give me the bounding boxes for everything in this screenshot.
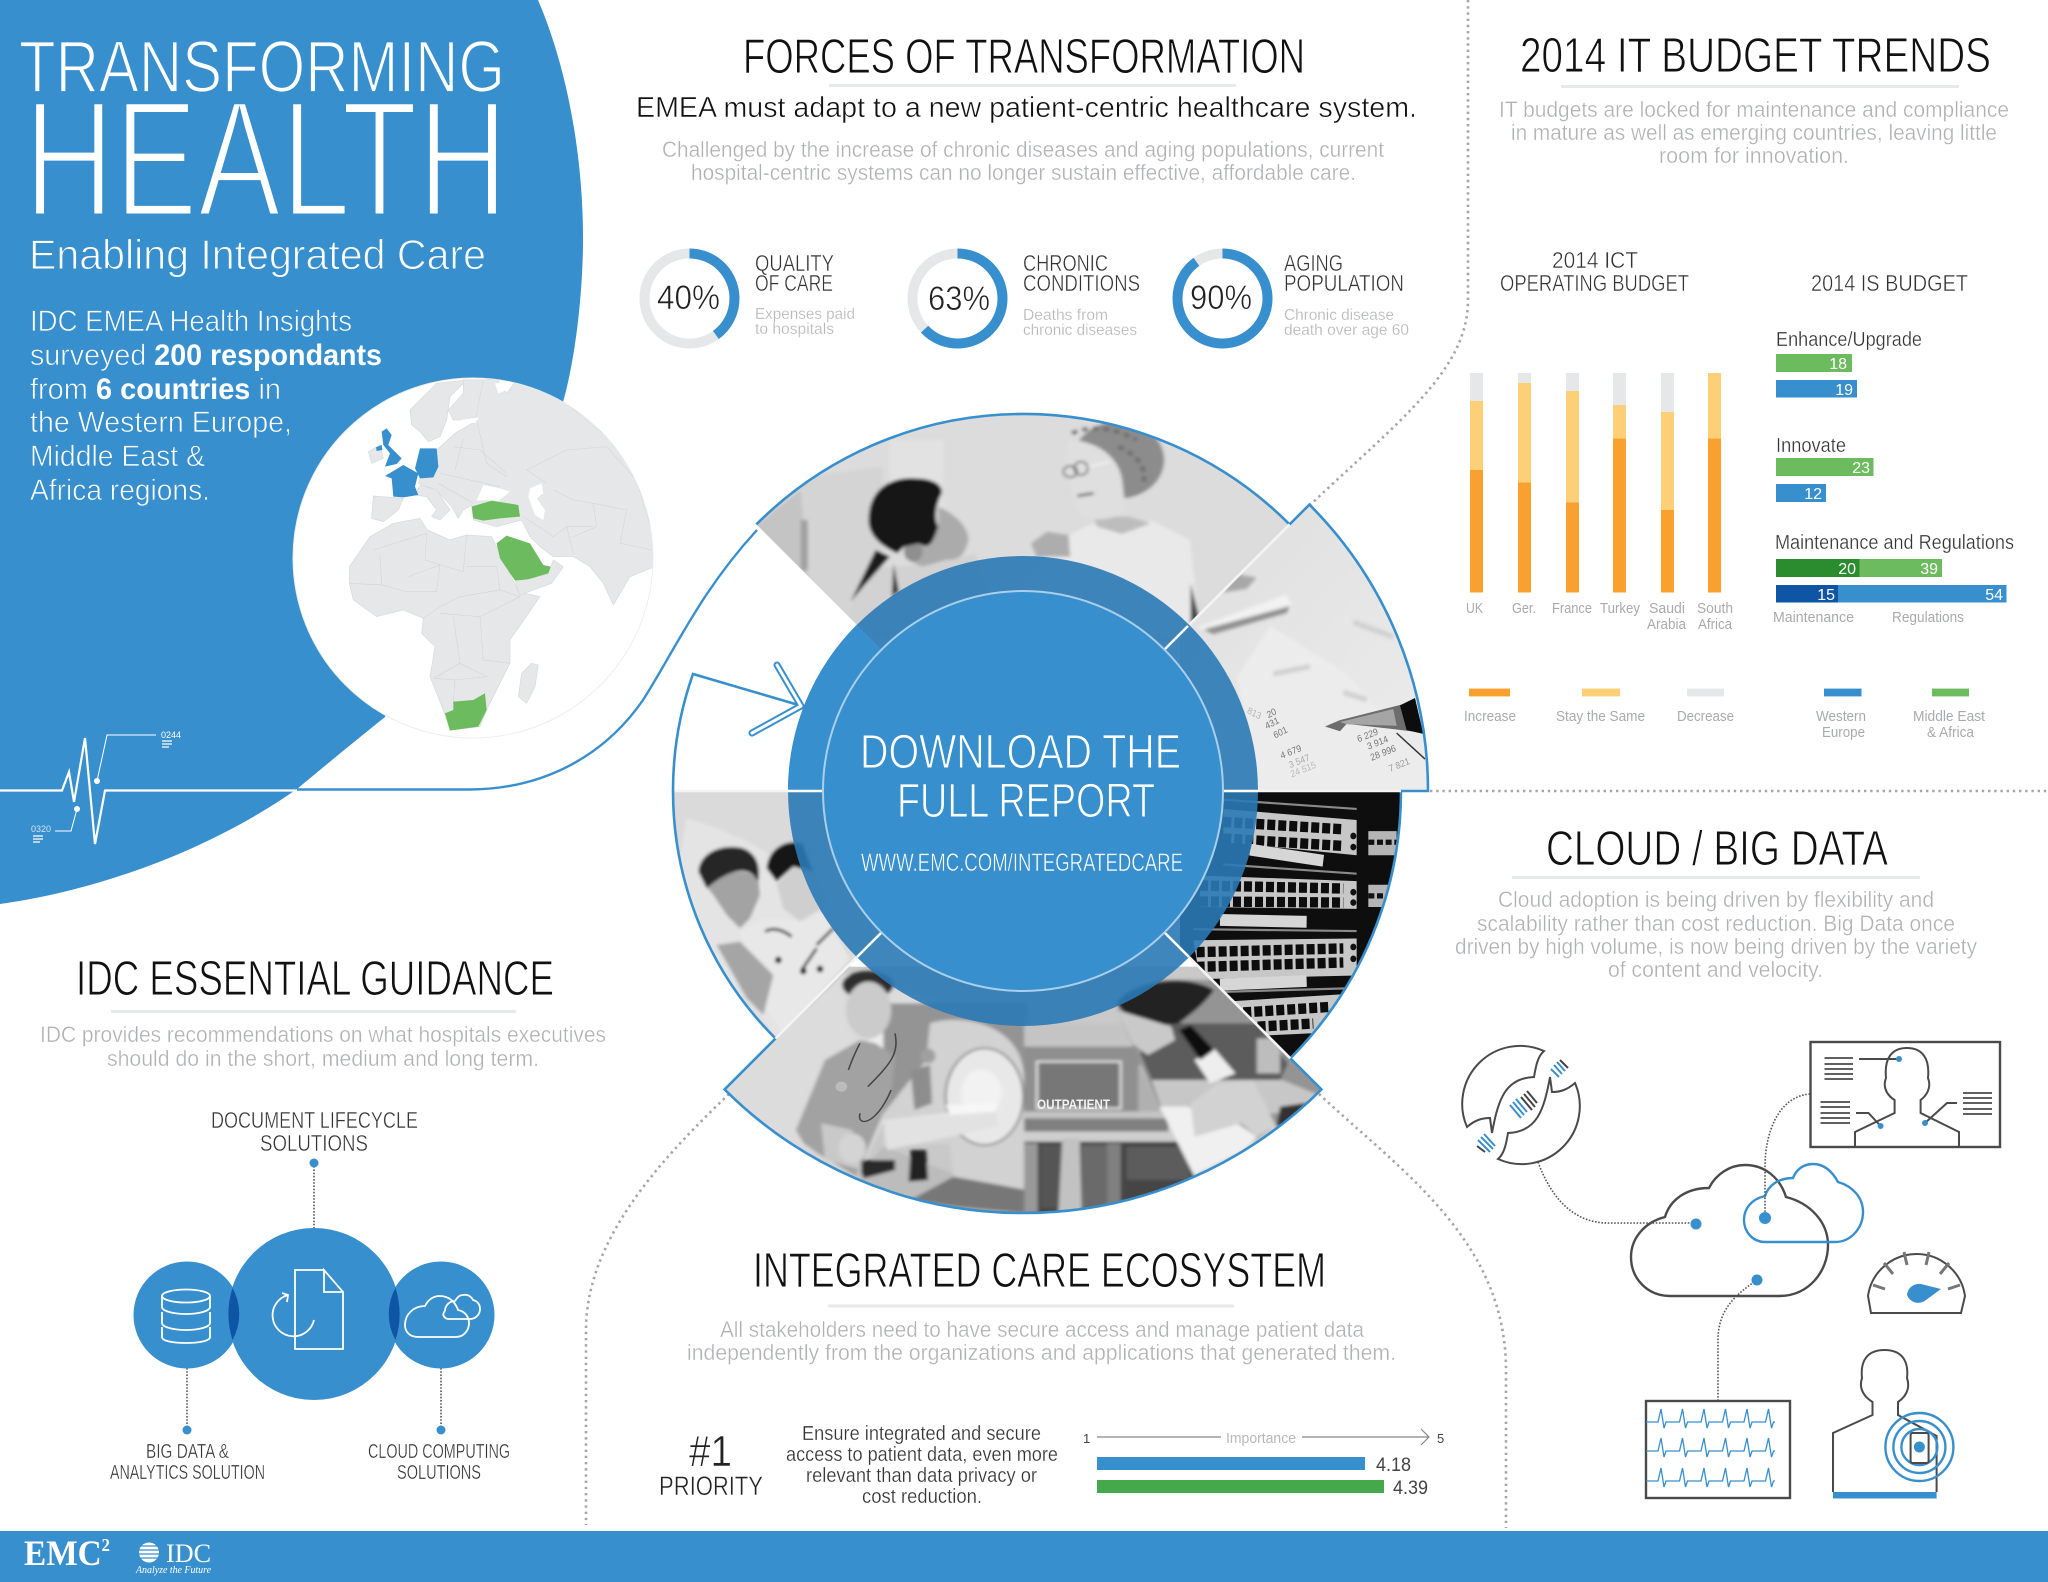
arrow	[752, 665, 801, 733]
heading: FORCES OF TRANSFORMATION	[743, 30, 1305, 84]
importance chart: 4.39	[1393, 1478, 1428, 1499]
priority: #1	[689, 1427, 732, 1476]
priority	[659, 1427, 763, 1501]
icon: clouds	[1538, 1094, 1863, 1400]
description: of content and velocity.	[1608, 957, 1823, 982]
importance chart: 1	[1083, 1431, 1090, 1446]
label quality: Expenses paid	[755, 306, 855, 323]
figures on paper	[1246, 705, 1411, 779]
label: cloud computing: SOLUTIONS	[397, 1462, 481, 1484]
figures on paper: 20	[1265, 706, 1278, 720]
importance chart: 5	[1437, 1431, 1444, 1446]
label: big data: ANALYTICS SOLUTION	[110, 1462, 265, 1484]
photo: server racks	[1180, 792, 1400, 1056]
logo: IDC: Analyze the Future	[135, 1565, 212, 1576]
central disk call to action: FULL REPORT	[897, 775, 1155, 828]
ICT chart title: 2014 ICT	[1552, 247, 1638, 273]
description: in mature as well as emerging countries, leaving little	[1511, 120, 1997, 145]
central disk call to action: WWW.EMC.COM/INTEGRATEDCARE	[861, 849, 1183, 877]
donut 63	[912, 254, 1002, 344]
description: IDC provides recommendations on what hospitals executives	[40, 1022, 606, 1047]
IS legend: Western	[1816, 708, 1866, 725]
description	[687, 1317, 1396, 1365]
ICT bar labels: Africa	[1698, 616, 1733, 633]
ICT legend	[1464, 689, 1734, 725]
importance chart: Importance	[1226, 1430, 1296, 1447]
ICT chart title	[1500, 247, 1689, 296]
country borders	[350, 420, 652, 703]
green countries	[445, 501, 551, 731]
label quality: OF CARE	[755, 270, 833, 296]
logo: IDC	[134, 1539, 212, 1576]
label quality	[755, 250, 855, 338]
figures on paper: 24 515	[1289, 760, 1317, 779]
icon: database	[162, 1290, 210, 1343]
label aging: Chronic disease	[1284, 307, 1394, 324]
madagascar	[518, 663, 538, 703]
enhance: Enhance/Upgrade	[1776, 329, 1922, 351]
figures on paper: 3 547	[1287, 752, 1311, 770]
ICT bar labels: Turkey	[1600, 600, 1640, 617]
central photo wheel	[667, 410, 1447, 1227]
description: All stakeholders need to have secure access and manage patient data	[720, 1317, 1365, 1342]
survey text: IDC EMEA Health Insights	[30, 305, 352, 338]
ICT chart title: OPERATING BUDGET	[1500, 270, 1689, 296]
maintenance	[1773, 532, 2014, 626]
title	[19, 27, 508, 252]
heading: CLOUD / BIG DATA	[1546, 822, 1888, 876]
map globe	[293, 378, 655, 738]
label aging: death over age 60	[1284, 322, 1409, 339]
figures on paper: 6 229	[1356, 726, 1379, 744]
photo: nurse, scanner, outpatient building, lab	[726, 966, 1320, 1212]
ICT bar labels	[1466, 600, 1733, 633]
maintenance: 20	[1838, 561, 1856, 578]
ICT legend: Decrease	[1677, 708, 1734, 725]
innovate	[1776, 435, 1874, 503]
title: HEALTH	[24, 67, 508, 252]
IDC essential guidance panel	[40, 952, 606, 1484]
description: hospital-centric systems can no longer sustain effective, affordable care.	[691, 160, 1356, 185]
segment dividers	[675, 524, 1401, 1058]
ICT bar labels: UK	[1466, 600, 1483, 617]
survey text: Middle East &	[30, 440, 205, 473]
logo: IDC: IDC	[166, 1539, 211, 1568]
ICT bar labels: Saudi	[1649, 600, 1685, 617]
logo: EMC: EMC	[24, 1533, 108, 1573]
figures on paper: 601	[1272, 724, 1289, 741]
heartbeat line	[0, 730, 297, 844]
ICT bar labels: South	[1697, 600, 1733, 617]
label: big data: BIG DATA &	[146, 1441, 229, 1463]
donut 40: 40%	[657, 279, 720, 317]
label chronic: CONDITIONS	[1023, 270, 1140, 296]
integrated care ecosystem panel	[659, 1244, 1444, 1508]
label aging	[1284, 250, 1409, 339]
forces of transformation panel	[636, 30, 1417, 344]
enhance: 18	[1829, 356, 1847, 373]
ring	[788, 556, 1258, 1026]
label chronic: chronic diseases	[1023, 322, 1137, 339]
enhance	[1776, 329, 1922, 399]
description: independently from the organizations and applications that generated them.	[687, 1340, 1396, 1365]
central disk call to action: DOWNLOAD THE	[860, 726, 1181, 779]
figures on paper: 431	[1263, 715, 1281, 731]
iberia	[372, 496, 403, 522]
figures on paper: 28 996	[1369, 743, 1397, 763]
label: document lifecycle: SOLUTIONS	[260, 1130, 368, 1156]
survey text: Africa regions.	[30, 474, 210, 507]
subtitle: Enabling Integrated Care	[29, 231, 486, 278]
label quality: QUALITY	[755, 250, 834, 276]
tagline: EMEA must adapt to a new patient-centric healthcare system.	[636, 92, 1417, 124]
maintenance: Maintenance	[1773, 609, 1854, 626]
description: room for innovation.	[1659, 143, 1849, 168]
eurasia	[418, 378, 655, 605]
maintenance: 39	[1920, 561, 1938, 578]
label aging: AGING	[1284, 250, 1343, 276]
priority text: Ensure integrated and secure	[802, 1423, 1041, 1445]
finland	[448, 380, 485, 420]
priority text: access to patient data, even more	[786, 1444, 1058, 1466]
priority text: relevant than data privacy or	[806, 1465, 1037, 1487]
heading: INTEGRATED CARE ECOSYSTEM	[753, 1244, 1326, 1298]
outline	[673, 414, 1428, 1213]
description: should do in the short, medium and long term.	[107, 1046, 539, 1071]
innovate: 12	[1804, 486, 1822, 503]
icon: dna	[1462, 1046, 1580, 1164]
description	[40, 1022, 606, 1071]
maintenance: 54	[1985, 587, 2003, 604]
heartbeat line: 0320	[31, 824, 51, 834]
photo: nurse and patient	[757, 415, 1288, 625]
description	[1455, 887, 1977, 982]
arabia south	[515, 560, 563, 595]
label: big data	[110, 1441, 265, 1484]
photo: doctors	[674, 791, 856, 1036]
label chronic: Deaths from	[1023, 307, 1108, 324]
heading: IDC ESSENTIAL GUIDANCE	[76, 952, 554, 1006]
title: TRANSFORMING	[19, 27, 505, 108]
photo: pen and figures	[1190, 506, 1426, 790]
donut 90: 90%	[1190, 279, 1252, 317]
venn diagram	[134, 1158, 494, 1434]
label aging: POPULATION	[1284, 270, 1404, 296]
icon: person with implant	[1833, 1350, 1953, 1498]
ICT bar labels: France	[1552, 600, 1592, 617]
ICT bar labels: Arabia	[1647, 616, 1687, 633]
enhance: 19	[1835, 382, 1853, 399]
italy	[415, 485, 450, 520]
maintenance: Regulations	[1892, 609, 1964, 626]
icon: clouds white	[405, 1295, 480, 1337]
IS legend: Middle East	[1913, 708, 1986, 725]
donut 90	[1178, 254, 1268, 344]
innovate: Innovate	[1776, 435, 1846, 457]
IS legend	[1816, 689, 1986, 741]
label chronic	[1023, 250, 1140, 339]
priority: PRIORITY	[659, 1471, 763, 1501]
icon: ecg screen	[1646, 1401, 1790, 1498]
donut 40	[644, 254, 734, 344]
blue countries	[376, 428, 438, 497]
survey text: surveyed 200 respondants	[30, 339, 382, 372]
priority text	[786, 1423, 1058, 1508]
innovate: 23	[1852, 460, 1870, 477]
central disk call to action	[823, 591, 1223, 991]
label quality: to hospitals	[755, 321, 834, 338]
outpatient sign: OUTPATIENT	[1037, 1096, 1110, 1112]
description: driven by high volume, is now being driven by the variety	[1455, 934, 1977, 959]
budget trends panel	[1464, 29, 2014, 741]
survey text	[30, 305, 382, 507]
IS legend: & Africa	[1927, 724, 1975, 741]
survey text: the Western Europe,	[30, 406, 292, 439]
ICT bar labels: Ger.	[1512, 600, 1536, 617]
black sea and caspian	[460, 382, 545, 520]
donut 63: 63%	[928, 280, 990, 318]
label: document lifecycle: DOCUMENT LIFECYCLE	[211, 1107, 418, 1133]
survey text: from 6 countries in	[30, 373, 281, 406]
description: Cloud adoption is being driven by flexibility and	[1498, 887, 1934, 912]
description: scalability rather than cost reduction. Big Data once	[1477, 911, 1955, 936]
figures on paper: 7 821	[1387, 756, 1411, 774]
logo: EMC: 2	[102, 1535, 110, 1555]
IS legend: Europe	[1822, 724, 1865, 741]
label: cloud computing	[368, 1441, 510, 1484]
priority text: cost reduction.	[862, 1486, 982, 1508]
figures on paper: 813	[1246, 705, 1263, 721]
IS chart: 2014 IS BUDGET	[1811, 270, 1968, 296]
description	[1499, 97, 2009, 168]
maintenance: Maintenance and Regulations	[1775, 532, 2014, 554]
footer band	[0, 1531, 2048, 1582]
cloud / big data panel	[1455, 822, 2000, 1498]
label: document lifecycle	[211, 1107, 418, 1156]
description	[662, 137, 1384, 185]
heartbeat line: 0244	[161, 730, 181, 740]
maintenance: 15	[1817, 587, 1835, 604]
description: Challenged by the increase of chronic diseases and aging populations, current	[662, 137, 1384, 162]
ireland	[368, 445, 383, 463]
importance chart: 4.18	[1376, 1455, 1411, 1476]
label chronic: CHRONIC	[1023, 250, 1108, 276]
icon: document cycle	[273, 1270, 343, 1349]
ICT legend: Increase	[1464, 708, 1516, 725]
ICT legend: Stay the Same	[1556, 708, 1645, 725]
importance chart	[1083, 1429, 1444, 1499]
description: IT budgets are locked for maintenance and compliance	[1499, 97, 2009, 122]
figures on paper: 4 679	[1279, 743, 1303, 761]
figures on paper: 3 914	[1366, 734, 1389, 752]
IS chart	[1773, 270, 2014, 626]
icon: patient scan	[1810, 1042, 2000, 1147]
hero panel: blue blob	[0, 0, 583, 904]
scandinavia	[410, 380, 467, 442]
africa	[349, 518, 540, 730]
icon: gauge	[1868, 1252, 1965, 1313]
ICT stacked bars	[1470, 373, 1721, 592]
label: cloud computing: CLOUD COMPUTING	[368, 1441, 510, 1463]
